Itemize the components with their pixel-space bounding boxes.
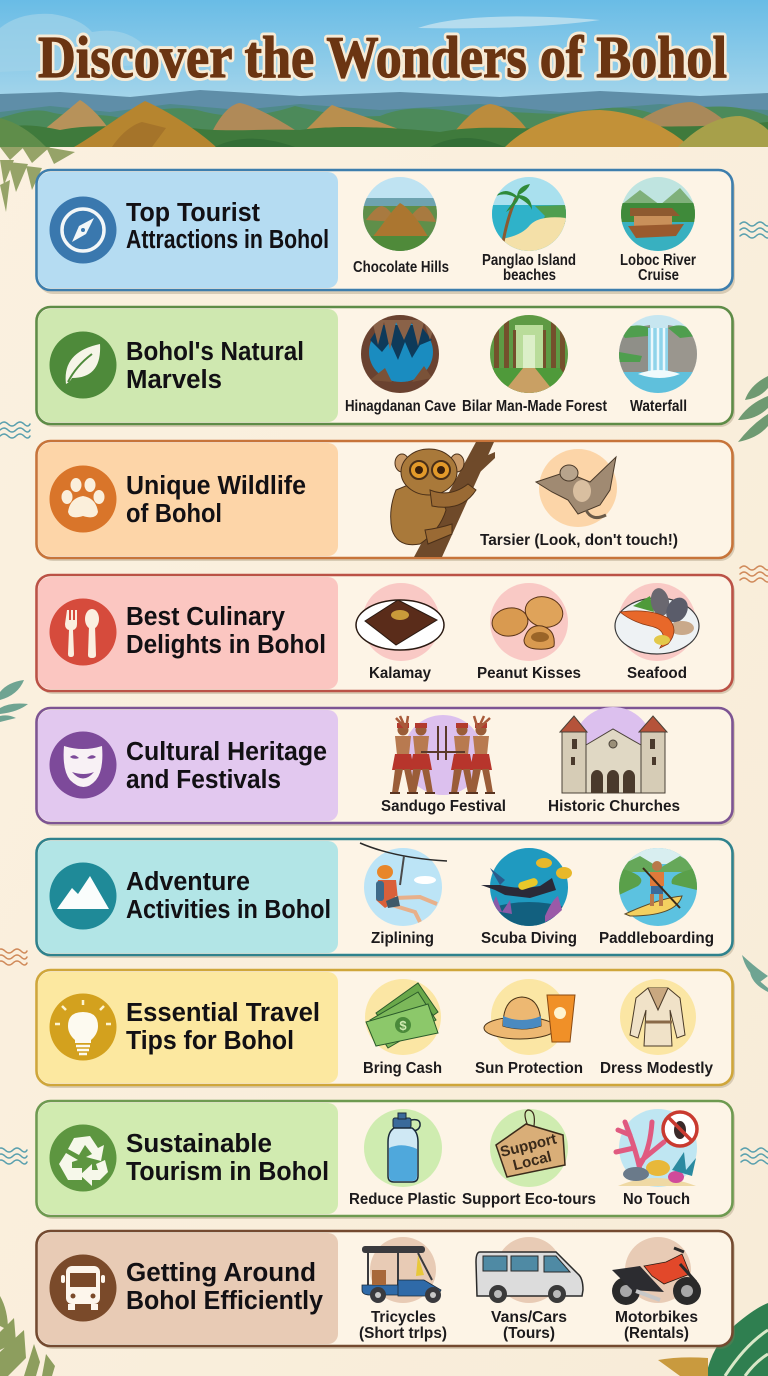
heading: [126, 472, 306, 528]
illustration: tarsier on branch: [391, 442, 495, 557]
panel: cultural heritage: [36, 707, 735, 826]
icon: mountains: [50, 862, 116, 930]
labels: [491, 1309, 567, 1342]
decoration: waves left bottom: [0, 1148, 27, 1164]
decoration: waves right middle: [740, 566, 768, 582]
labels: Motorbikes: [615, 1309, 698, 1326]
heading: Sustainable: [126, 1130, 272, 1158]
heading: Marvels: [126, 366, 222, 394]
labels: Cruise: [638, 267, 679, 284]
heading: [126, 1130, 329, 1186]
illustration: support local tag: [490, 1109, 568, 1187]
icon: light bulb: [50, 994, 116, 1060]
illustration: sun hat and sunscreen: [484, 979, 575, 1055]
heading: Unique Wildlife: [126, 472, 306, 500]
labels: (Short trlps): [359, 1325, 447, 1342]
decoration: dry leaf bottom right: [658, 1357, 708, 1376]
label: Bilar Man-Made Forest: [462, 398, 607, 415]
labels: [620, 252, 696, 284]
heading: and Festivals: [126, 766, 281, 794]
illustration: cash: $: [399, 1018, 407, 1033]
labels: (Rentals): [624, 1325, 689, 1342]
heading: [126, 868, 331, 924]
heading: Tips for Bohol: [126, 1027, 294, 1055]
heading: Tourism in Bohol: [126, 1158, 329, 1186]
heading: Best Culinary: [126, 603, 286, 631]
label: Chocolate Hills: [353, 259, 449, 276]
decoration: leaf sprig left: [0, 680, 28, 722]
labels: Tricycles: [371, 1309, 436, 1326]
label: Ziplining: [371, 930, 434, 947]
illustration: man-made forest: [490, 315, 568, 393]
heading: Adventure: [126, 868, 250, 896]
label: Sun Protection: [475, 1060, 583, 1077]
illustration: van: [476, 1237, 583, 1303]
panel: adventure activities: [36, 839, 735, 958]
heading: of Bohol: [126, 500, 222, 528]
illustration: modest robe: [620, 979, 696, 1055]
panel: getting around: [36, 1231, 735, 1349]
panel: culinary delights: [36, 575, 735, 694]
illustration: hinagdanan cave: [361, 315, 439, 393]
illustration: peanut kisses: [490, 583, 568, 661]
heading: Cultural Heritage: [126, 738, 327, 766]
heading: [126, 603, 326, 659]
illustration: motorbike: [612, 1237, 701, 1305]
decoration: leaf sprig right: [738, 376, 768, 442]
icon: fork and spoon: [50, 598, 116, 666]
labels: Vans/Cars: [491, 1309, 567, 1326]
labels: [615, 1309, 698, 1342]
label: Support Eco-tours: [462, 1191, 596, 1208]
label: Hinagdanan Cave: [345, 398, 456, 415]
panel: travel tips: [36, 970, 735, 1088]
decoration: palm frond bottom left: [0, 1296, 55, 1376]
illustration: scuba diving: [481, 848, 572, 926]
label: Kalamay: [369, 665, 431, 682]
panel: top tourist attractions: [36, 170, 735, 294]
icon: theatre mask: [50, 732, 116, 798]
heading: Bohol Efficiently: [126, 1287, 324, 1315]
heading: Activities in Bohol: [126, 896, 331, 924]
label: Dress Modestly: [600, 1060, 713, 1077]
panel: natural marvels: [36, 307, 735, 427]
labels: beaches: [503, 267, 556, 284]
icon: leaf: [50, 332, 116, 398]
illustration: kalamay: [356, 583, 444, 661]
illustration: cash: [365, 979, 441, 1055]
heading: [126, 1259, 324, 1315]
heading: Delights in Bohol: [126, 631, 326, 659]
illustration: seafood plate: [615, 583, 699, 661]
label: Waterfall: [630, 398, 687, 415]
label: Paddleboarding: [599, 930, 714, 947]
decoration: palm frond top left: [0, 147, 75, 212]
illustration: historic church: [560, 707, 667, 793]
heading: Top Tourist: [126, 199, 260, 227]
panel: unique wildlife: [36, 441, 735, 561]
label: Seafood: [627, 665, 687, 682]
heading: [126, 199, 329, 254]
labels: (Tours): [503, 1325, 555, 1342]
illustration: tricycle: [362, 1237, 441, 1303]
decoration: waves left lower: [0, 949, 27, 965]
icon: compass: [50, 196, 116, 264]
label: No Touch: [623, 1191, 690, 1208]
label: Peanut Kisses: [477, 665, 581, 682]
illustration: water bottle: [364, 1109, 442, 1187]
illustration: sandugo festival: [390, 715, 495, 795]
labels: [482, 252, 576, 284]
icon: bus: [50, 1254, 116, 1322]
decoration: waves left upper: [0, 422, 30, 438]
label: Historic Churches: [548, 798, 680, 815]
header banner landscape: [0, 0, 768, 147]
decoration: leaf sprig right lower: [742, 955, 768, 992]
labels: Panglao Island: [482, 252, 576, 269]
label: Bring Cash: [363, 1060, 442, 1077]
illustration: panglao beach: [492, 177, 566, 251]
decoration: monstera leaf bottom right: [706, 1303, 768, 1376]
illustration: coral no touch: [616, 1109, 697, 1187]
heading: [126, 999, 320, 1055]
illustration: support local tag: Local: [511, 1148, 553, 1174]
heading: Attractions in Bohol: [126, 226, 329, 254]
label: Tarsier (Look, don't touch!): [480, 532, 678, 549]
label: Scuba Diving: [481, 930, 577, 947]
heading: Bohol's Natural: [126, 338, 304, 366]
icon: recycle: [50, 1124, 116, 1192]
labels: [359, 1309, 447, 1342]
heading: [126, 738, 327, 794]
illustration: paddleboarding: [619, 848, 697, 926]
illustration: ziplining: [360, 843, 447, 926]
heading: Essential Travel: [126, 999, 320, 1027]
icon: paw: [50, 466, 116, 532]
illustration: chocolate hills: [363, 177, 437, 251]
illustration: waterfall: [619, 315, 697, 393]
illustration: flying lemur: [536, 449, 617, 527]
illustration: support local tag: Support: [498, 1130, 558, 1161]
panel: sustainable tourism: [36, 1101, 735, 1219]
label: Reduce Plastic: [349, 1191, 456, 1208]
label: Sandugo Festival: [381, 798, 506, 815]
heading: Getting Around: [126, 1259, 316, 1287]
labels: Loboc River: [620, 252, 696, 269]
decoration: waves right bottom: [741, 1148, 768, 1164]
heading: [126, 338, 304, 394]
decoration: waves right top: [740, 222, 768, 238]
illustration: loboc river cruise: [621, 177, 695, 252]
